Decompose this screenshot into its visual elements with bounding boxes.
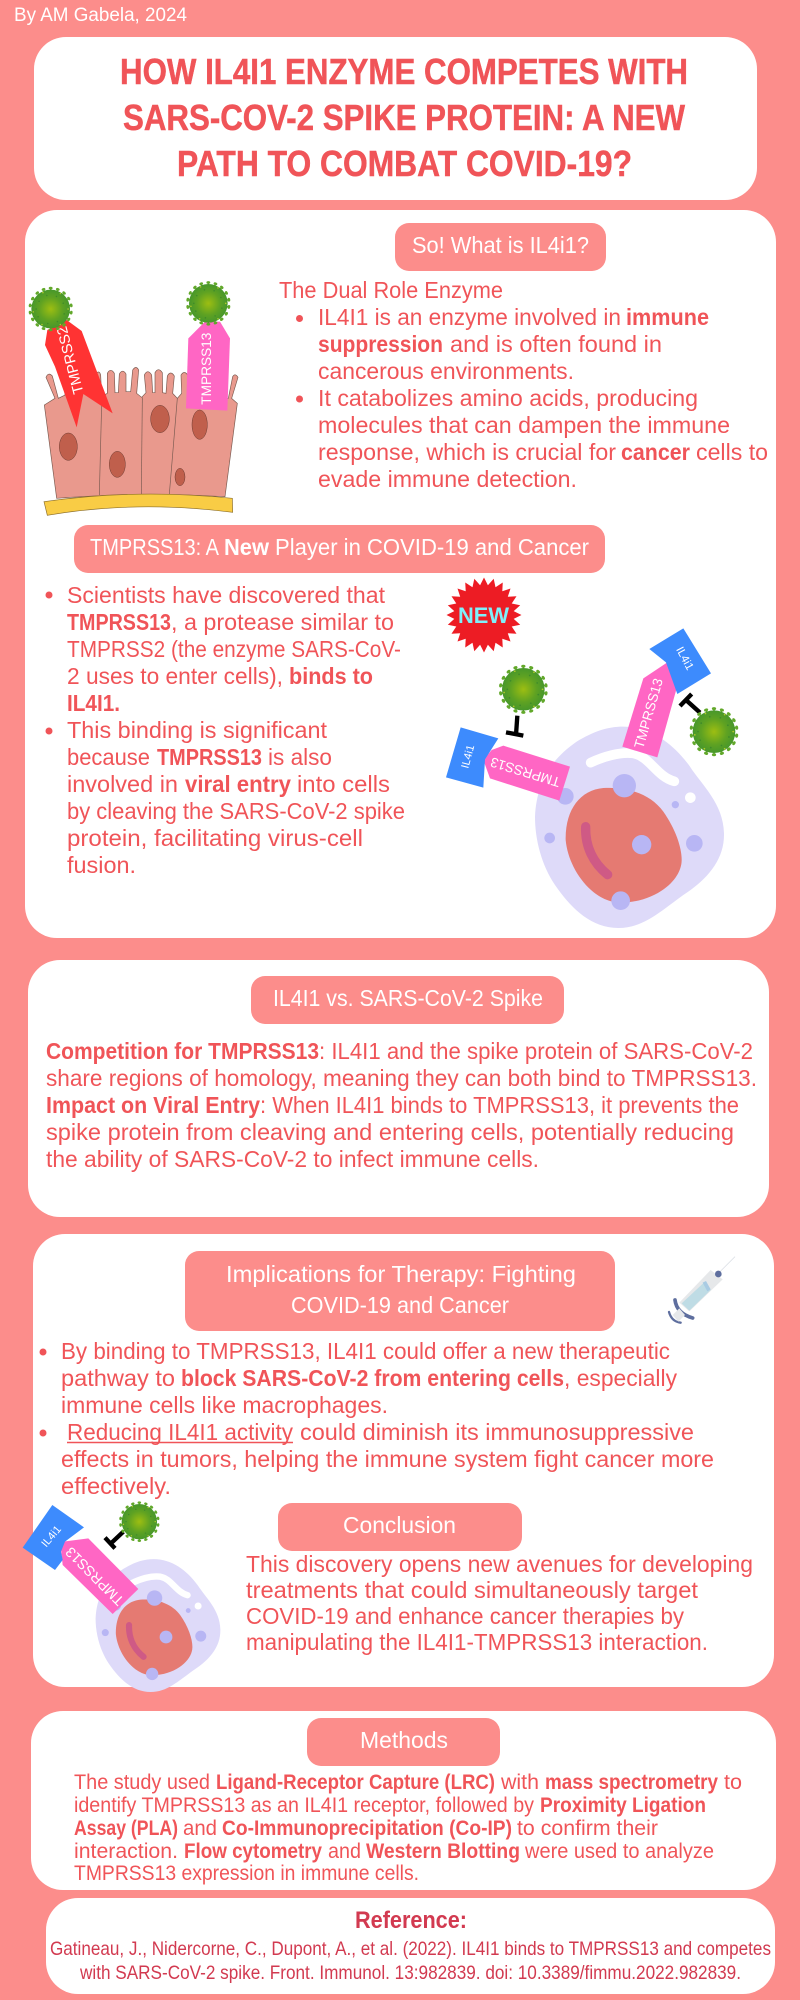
text block: TMPRSS13 bullets: viral entry: [185, 771, 291, 797]
text block: methods: [74, 1771, 742, 1885]
illustration: small immune cell with bound IL4I1: [23, 1501, 220, 1692]
left TMPRSS13: TMPRSS13: [489, 754, 562, 790]
heading: So! What is IL4i1?: [395, 223, 606, 271]
text block: methods: and: [328, 1840, 361, 1863]
heading: TMPRSS13 new player: New: [224, 534, 270, 560]
text block: methods: identify TMPRSS13 as an IL4I1 receptor, followed by: [74, 1794, 534, 1817]
text block: methods: Western Blotting: [366, 1840, 520, 1863]
text block: TMPRSS13 bullets: because: [67, 744, 150, 770]
heading: methods: Methods: [360, 1727, 448, 1753]
right TMPRSS13: [622, 662, 677, 757]
text block: competition and impact: share regions of homology, meaning they can both bind to TMPRSS13.: [46, 1065, 757, 1091]
text block: methods: TMPRSS13 expression in immune cells.: [74, 1862, 419, 1885]
credit: By AM Gabela, 2024: By AM Gabela, 2024: [14, 5, 187, 26]
text block: methods: interaction.: [74, 1840, 178, 1863]
text block: therapy bullets: [40, 1338, 714, 1499]
citation: [50, 1938, 771, 1984]
text block: TMPRSS13 bullets: by cleaving the SARS-CoV-2 spike: [67, 798, 405, 824]
text block: The Dual Role Enzyme: [279, 277, 768, 492]
text block: competition and impact: : When IL4I1 binds to TMPRSS13, it prevents the: [260, 1092, 739, 1118]
inhibition bar left: [506, 716, 523, 736]
icon: NEW starburst: NEW: [458, 603, 509, 628]
text block: TMPRSS13 bullets: protein, facilitating virus-cell: [67, 825, 363, 851]
text block: therapy bullets: , especially: [564, 1365, 677, 1391]
text block: methods: Proximity Ligation: [540, 1794, 706, 1817]
text block: The Dual Role Enzyme: response, which is crucial for: [318, 439, 616, 465]
text block: methods: Co-Immunoprecipitation (Co-IP): [222, 1817, 512, 1840]
text block: The Dual Role Enzyme: and is often found in: [450, 331, 662, 357]
text block: TMPRSS13 bullets: involved in: [67, 771, 178, 797]
text block: The Dual Role Enzyme: cells to: [696, 439, 768, 465]
text block: competition and impact: : IL4I1 and the spike protein of SARS-CoV-2: [319, 1038, 753, 1064]
text block: methods: The study used: [74, 1771, 210, 1794]
heading: reference: Reference:: [355, 1907, 467, 1934]
text block: competition and impact: Competition for TMPRSS13: [46, 1038, 319, 1064]
TMPRSS13 marker: TMPRSS13: [199, 333, 214, 405]
TMPRSS13 marker: [186, 322, 230, 411]
text block: The Dual Role Enzyme: immune: [626, 304, 709, 330]
text block: TMPRSS13 bullets: TMPRSS2 (the enzyme SARS-CoV-: [67, 636, 401, 662]
text block: TMPRSS13 bullets: binds to: [289, 663, 373, 689]
heading: implications for therapy: COVID-19 and Cancer: [291, 1292, 509, 1318]
text block: competition and impact: Impact on Viral Entry: [46, 1092, 260, 1118]
text block: therapy bullets: effectively.: [61, 1473, 171, 1499]
text block: The Dual Role Enzyme: cancerous environments.: [318, 358, 574, 384]
text block: The Dual Role Enzyme: molecules that can dampen the immune: [318, 412, 730, 438]
text block: therapy bullets: effects in tumors, helping the immune system fight cancer more: [61, 1446, 714, 1472]
icon: virus right: [689, 707, 739, 756]
heading: TMPRSS13 new player: Player in COVID-19 and Cancer: [275, 534, 589, 560]
text block: The Dual Role Enzyme: The Dual Role Enzyme: [279, 277, 503, 303]
icon: virus: [119, 1501, 160, 1542]
heading: TMPRSS13 new player: TMPRSS13: A: [90, 534, 219, 560]
panel: reference: [46, 1898, 775, 1994]
title: SARS-COV-2 SPIKE PROTEIN: A NEW: [123, 97, 685, 138]
text block: TMPRSS13 bullets: TMPRSS13: [67, 609, 171, 635]
text block: TMPRSS13 bullets: IL4I1.: [67, 690, 120, 716]
text block: therapy bullets: pathway to: [61, 1365, 175, 1391]
text block: conclusion: This discovery opens new avenues for developing: [246, 1551, 753, 1577]
text block: methods: to: [724, 1771, 742, 1794]
left IL4I1: [446, 727, 498, 788]
icon: NEW starburst: [446, 578, 522, 652]
TMPRSS2 marker: TMPRSS2: [55, 324, 87, 396]
inhibition bar: [105, 1532, 123, 1548]
text block: methods: and: [183, 1817, 217, 1840]
small TMPRSS13: TMPRSS13: [63, 1543, 128, 1608]
illustration: epithelial cells with TMPRSS2 and TMPRSS13: [28, 281, 238, 515]
text block: methods: were used to analyze: [524, 1840, 714, 1863]
icon: virus right: [186, 281, 231, 326]
text block: therapy bullets: Reducing IL4I1 activity: [67, 1419, 293, 1445]
heading: So! What is IL4i1?: So! What is IL4i1?: [412, 232, 589, 258]
text block: TMPRSS13 bullets: 2 uses to enter cells),: [67, 663, 283, 689]
title: PATH TO COMBAT COVID-19?: [177, 143, 632, 184]
small IL4I1: IL4i1: [39, 1524, 64, 1550]
heading: TMPRSS13 new player: [74, 525, 605, 573]
panel: what is IL4I1 and TMPRSS13: [25, 210, 776, 938]
heading: conclusion: [278, 1503, 522, 1551]
illustration: immune cell with TMPRSS13 and IL4I1: [446, 628, 739, 928]
text block: The Dual Role Enzyme: cancer: [621, 439, 690, 465]
panel: title: [34, 37, 757, 200]
text block: methods: mass spectrometry: [545, 1771, 718, 1794]
text block: conclusion: COVID-19 and enhance cancer therapies by: [246, 1603, 684, 1629]
right IL4I1: IL4i1: [673, 645, 695, 672]
text block: conclusion: manipulating the IL4I1-TMPRSS13 interaction.: [246, 1629, 708, 1655]
text block: competition and impact: the ability of SARS-CoV-2 to infect immune cells.: [46, 1146, 539, 1172]
text block: The Dual Role Enzyme: suppression: [318, 331, 443, 357]
text block: conclusion: treatments that could simultaneously target: [246, 1577, 698, 1603]
heading: IL4I1 vs. SARS-CoV-2 Spike: IL4I1 vs. SARS-CoV-2 Spike: [273, 985, 543, 1011]
text block: therapy bullets: block SARS-CoV-2 from entering cells: [181, 1365, 564, 1391]
text block: methods: Flow cytometry: [184, 1840, 322, 1863]
text block: competition and impact: [46, 1038, 757, 1172]
text block: TMPRSS13 bullets: TMPRSS13: [157, 744, 262, 770]
right TMPRSS13: TMPRSS13: [632, 677, 666, 750]
text block: TMPRSS13 bullets: Scientists have discovered that: [67, 582, 385, 608]
text block: The Dual Role Enzyme: IL4I1 is an enzyme involved in: [318, 304, 621, 330]
title: HOW IL4I1 ENZYME COMPETES WITH: [120, 51, 688, 92]
text block: TMPRSS13 bullets: fusion.: [67, 852, 136, 878]
text block: methods: Assay (PLA): [74, 1817, 178, 1840]
panel: IL4I1 vs spike: [28, 960, 769, 1217]
text block: methods: Ligand-Receptor Capture (LRC): [216, 1771, 495, 1794]
panel: implications and conclusion: [33, 1234, 774, 1687]
text block: The Dual Role Enzyme: evade immune detection.: [318, 466, 577, 492]
left TMPRSS13: [483, 746, 570, 801]
left IL4I1: IL4i1: [459, 744, 477, 770]
title: [120, 51, 688, 184]
heading: conclusion: Conclusion: [343, 1512, 456, 1538]
right IL4I1: [649, 628, 711, 694]
icon: virus top: [499, 665, 548, 714]
text block: methods: to confirm their: [517, 1817, 658, 1840]
text block: TMPRSS13 bullets: into cells: [297, 771, 390, 797]
heading: methods: [307, 1718, 500, 1766]
text block: TMPRSS13 bullets: , a protease similar to: [171, 609, 394, 635]
heading: implications for therapy: Implications for Therapy: Fighting: [226, 1261, 576, 1287]
text block: TMPRSS13 bullets: This binding is significant: [67, 717, 327, 743]
text block: competition and impact: spike protein from cleaving and entering cells, potentially reducing: [46, 1119, 734, 1145]
heading: IL4I1 vs. SARS-CoV-2 Spike: [251, 976, 564, 1024]
heading: implications for therapy: [185, 1251, 615, 1331]
icon: syringe: [669, 1257, 735, 1323]
text block: therapy bullets: immune cells like macrophages.: [61, 1392, 388, 1418]
text block: therapy bullets: could diminish its immunosuppressive: [300, 1419, 694, 1445]
text block: therapy bullets: By binding to TMPRSS13, IL4I1 could offer a new therapeutic: [61, 1338, 670, 1364]
text block: TMPRSS13 bullets: [46, 582, 405, 878]
text block: methods: with: [500, 1771, 539, 1794]
TMPRSS2 marker: [45, 320, 113, 427]
text block: conclusion: [246, 1551, 753, 1655]
text block: TMPRSS13 bullets: is also: [268, 744, 332, 770]
inhibition bar right: [680, 694, 700, 713]
icon: virus left: [28, 287, 73, 331]
panel: methods: [31, 1711, 776, 1890]
text block: The Dual Role Enzyme: It catabolizes amino acids, producing: [318, 385, 698, 411]
